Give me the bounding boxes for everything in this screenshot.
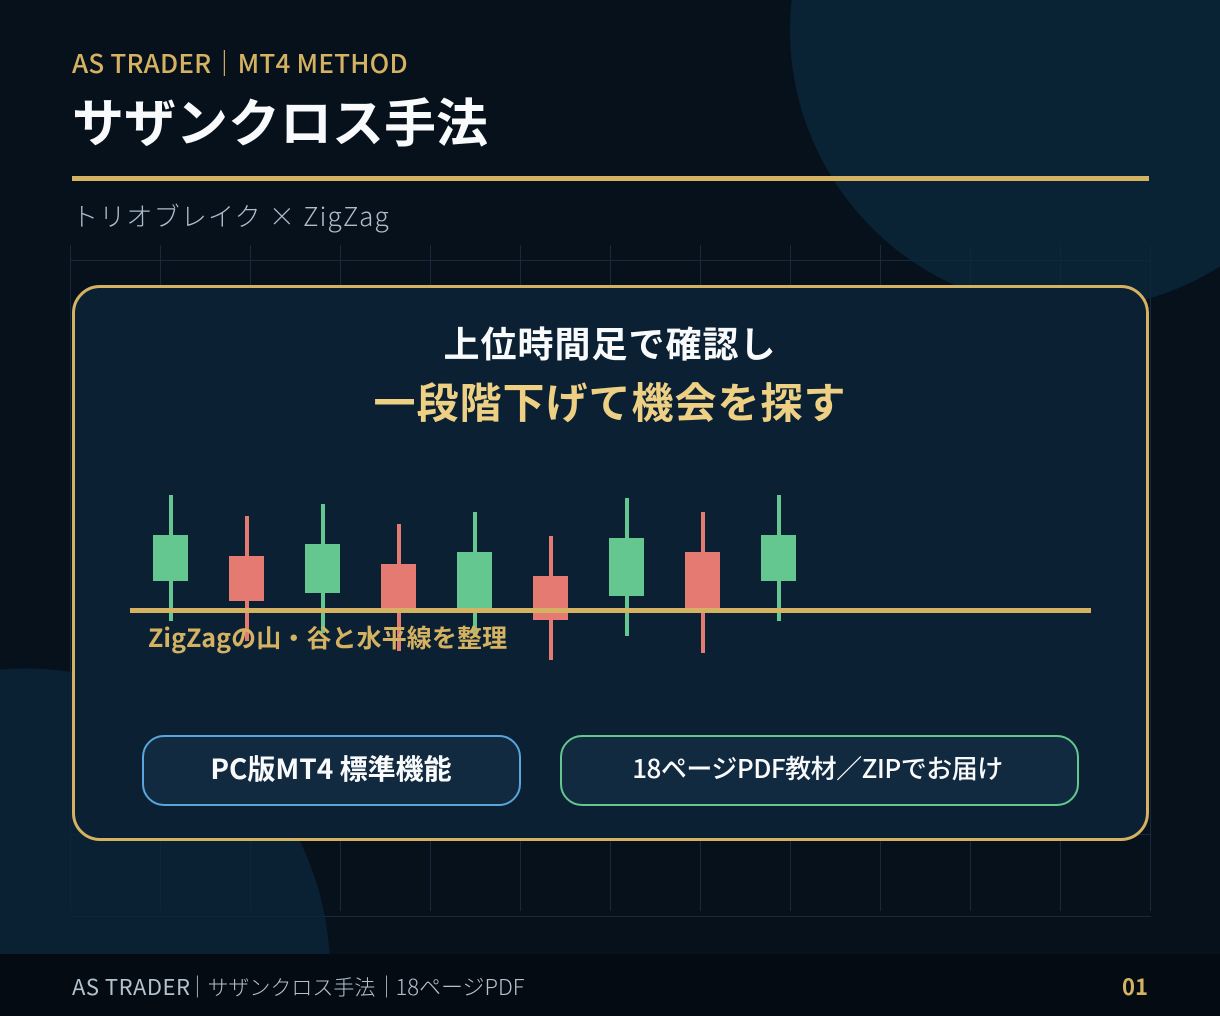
candle 1 xyxy=(153,495,188,621)
pill: PDF ZIP xyxy=(560,735,1079,806)
footer text: AS TRADER｜サザンクロス手法｜18ページPDF xyxy=(72,970,525,1002)
horizontal level line xyxy=(130,608,1091,613)
subtitle: トリオブレイク × ZigZag xyxy=(72,197,390,234)
candle 2 xyxy=(229,516,264,641)
candle 9 xyxy=(761,495,796,621)
candle 8 xyxy=(685,512,720,653)
heading: line 1: 上位時間足で確認し xyxy=(443,316,776,368)
candle 7 xyxy=(609,498,644,636)
pill: PC MT4 xyxy=(142,735,521,806)
gold divider xyxy=(72,176,1149,181)
page number: 01 xyxy=(1122,970,1148,1002)
title: サザンクロス手法 xyxy=(72,82,488,157)
heading: line 2: 一段階下げて機会を探す xyxy=(373,370,846,431)
candle 5 xyxy=(457,512,492,637)
panel: main card xyxy=(72,285,1149,841)
candle 6 xyxy=(533,536,568,660)
pill text: PC MT4: PC版MT4 標準機能 xyxy=(210,748,452,788)
candle 3 xyxy=(305,504,340,633)
background circle: bottom left xyxy=(0,668,330,954)
candle 4 xyxy=(381,524,416,651)
pill text: PDF ZIP: 18ページPDF教材／ZIPでお届け xyxy=(632,749,1003,786)
footer bar xyxy=(0,954,1220,1016)
chart caption: ZigZagの山・谷と水平線を整理 xyxy=(148,619,507,655)
eyebrow label: AS TRADER｜MT4 METHOD xyxy=(72,44,408,81)
background circle: top right xyxy=(790,0,1220,300)
